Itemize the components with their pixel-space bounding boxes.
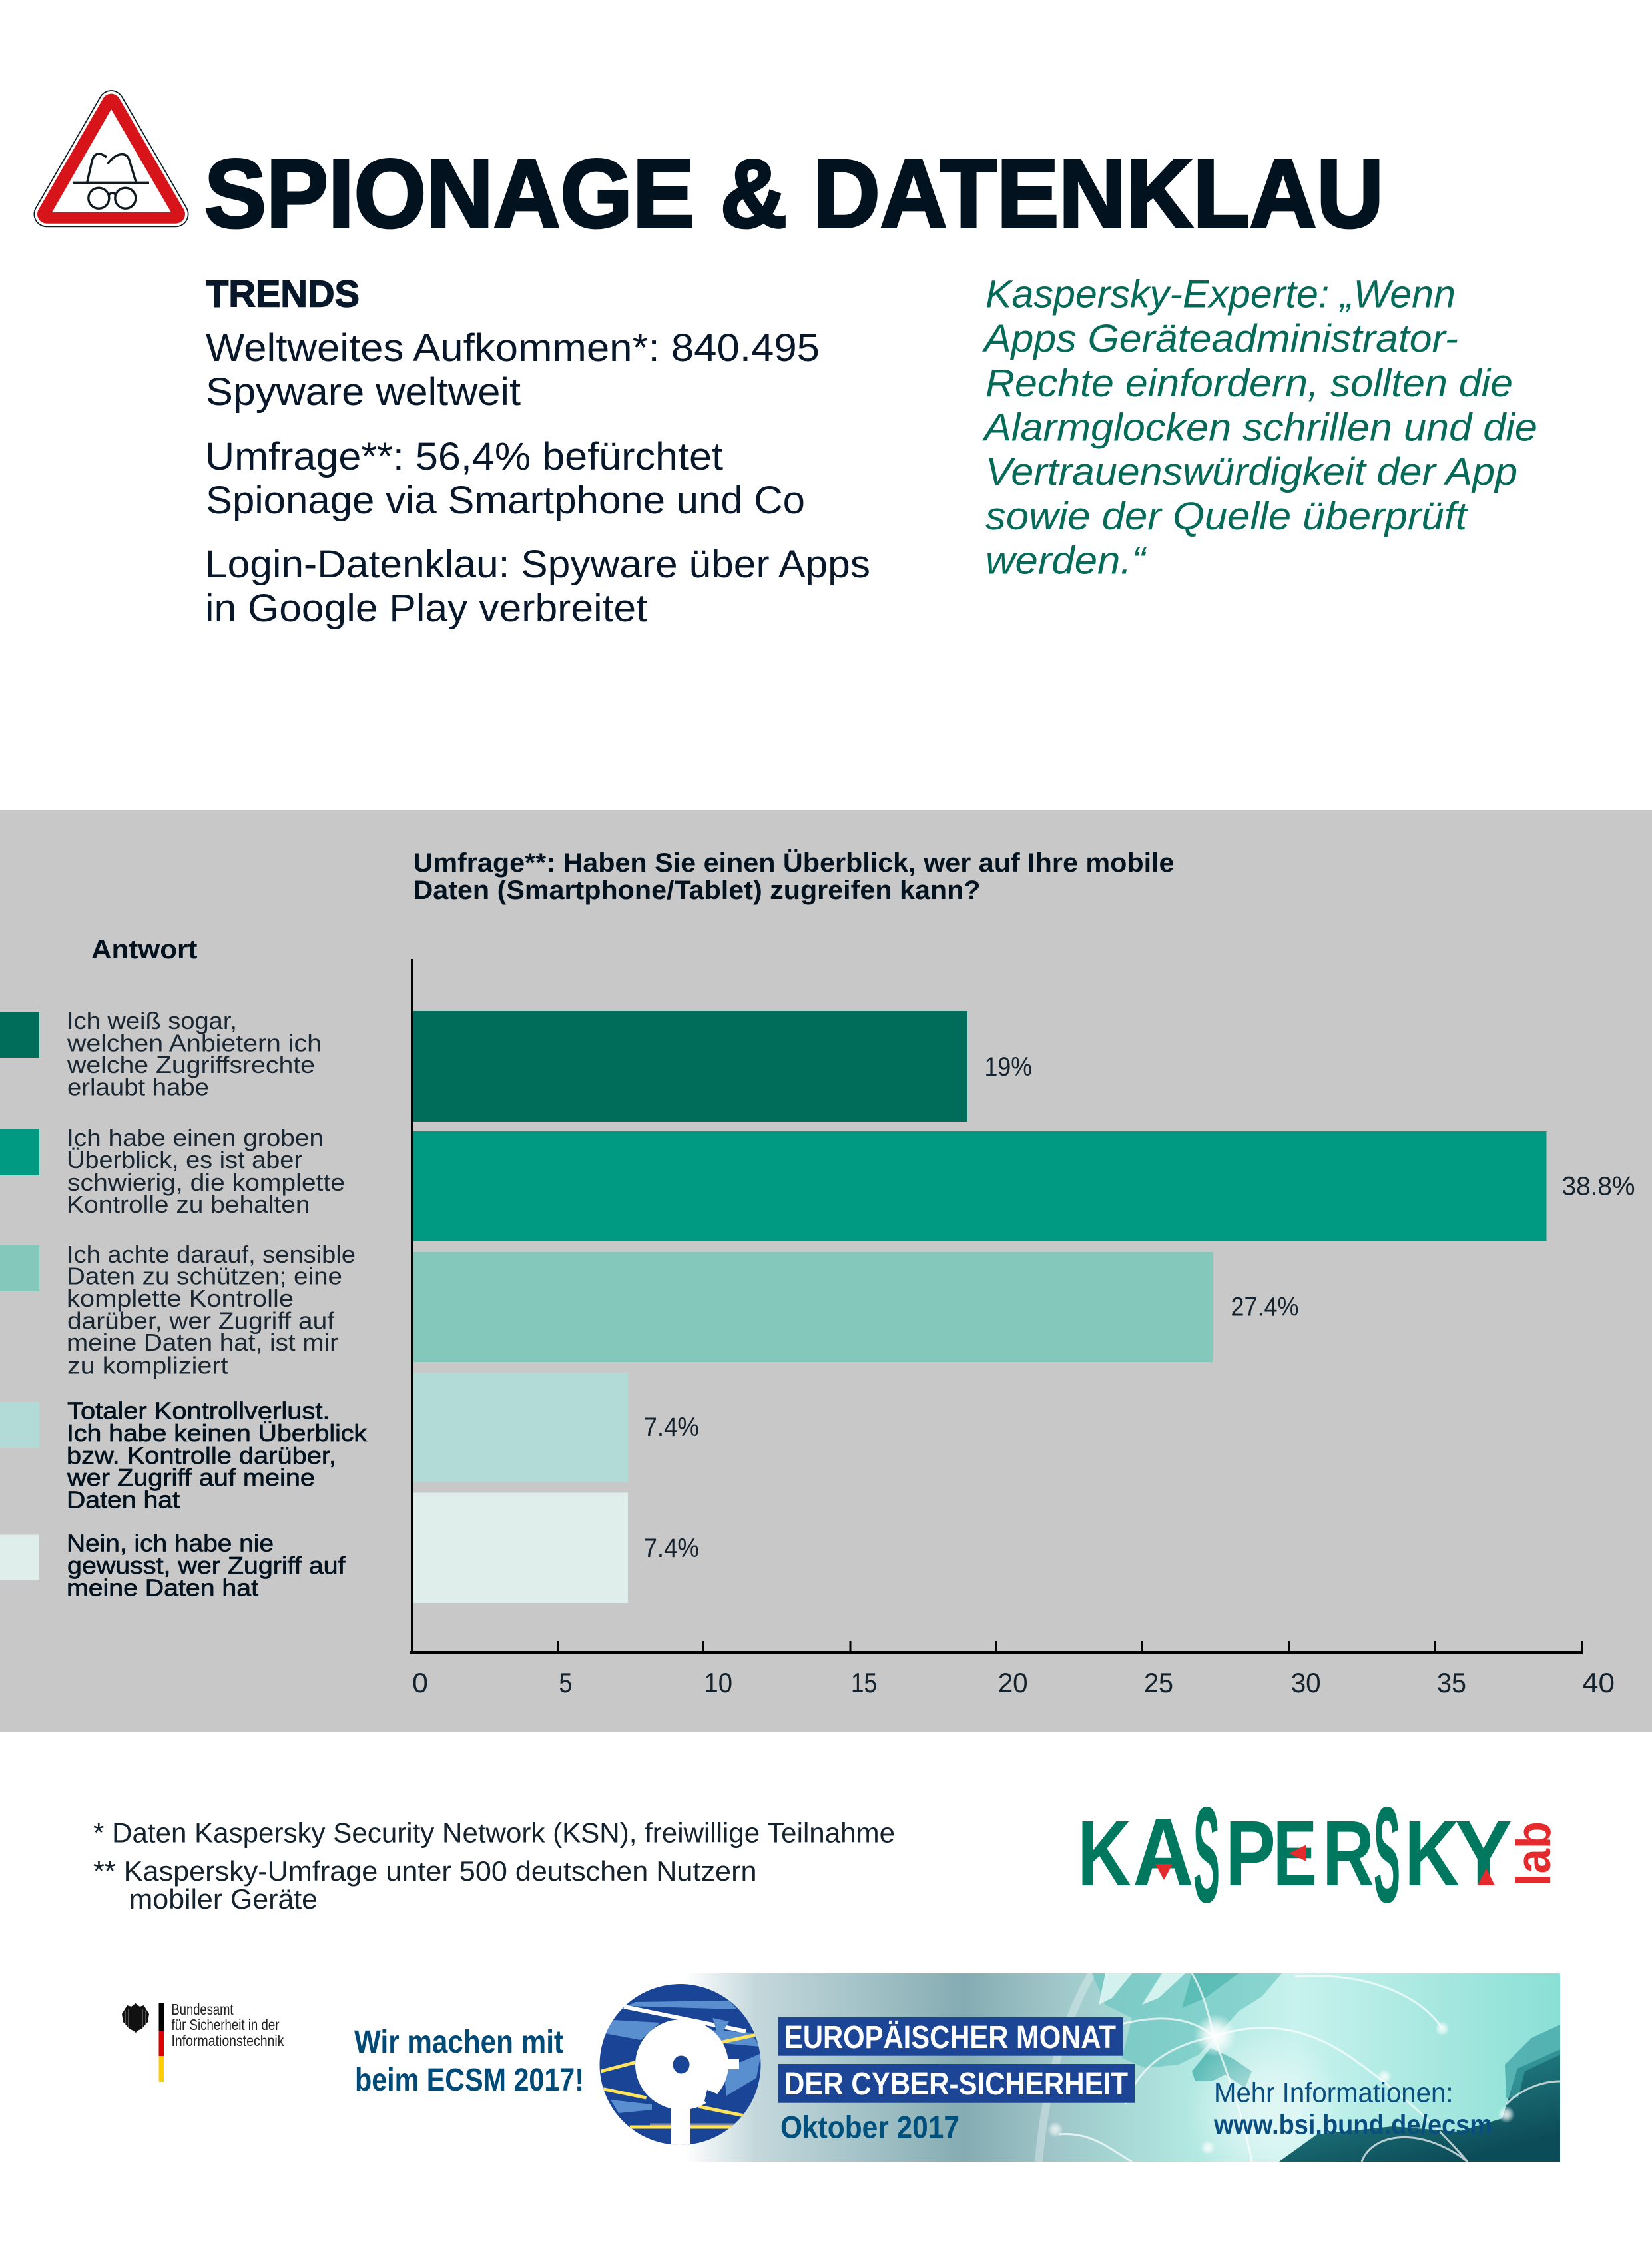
agency name: Bundesamt	[172, 2001, 234, 2018]
trend 3: in Google Play verbreitet	[205, 587, 647, 630]
axis labels: 15	[851, 1667, 877, 1698]
trend 3	[205, 543, 870, 630]
bar 7.4% second: 7.4%	[643, 1534, 699, 1563]
axis labels: 40	[1582, 1667, 1615, 1698]
more information: Mehr Informationen:	[1214, 2077, 1453, 2108]
kaspersky logo: lab	[1507, 1821, 1561, 1886]
legend swatch 1	[0, 1012, 39, 1058]
legend text 1: erlaubt habe	[67, 1074, 209, 1101]
title box 2: DER CYBER-SICHERHEIT	[784, 2067, 1128, 2102]
legend text 3: meine Daten hat, ist mir	[67, 1329, 338, 1356]
bar 38.8%	[413, 1131, 1635, 1241]
kaspersky logo: K	[1404, 1801, 1460, 1905]
expert quote: Kaspersky-Experte: „Wenn	[985, 273, 1456, 316]
title: SPIONAGE & DATENKLAU	[204, 139, 1384, 248]
ECSM emblem	[599, 1984, 761, 2151]
bar 19%	[413, 1011, 1032, 1122]
expert quote	[982, 273, 1537, 583]
legend swatch 2	[0, 1129, 39, 1175]
footnotes: mobiler Geräte	[129, 1883, 318, 1915]
flag bar	[158, 2003, 164, 2082]
axis labels	[412, 1667, 1615, 1698]
trends text block	[205, 273, 870, 630]
axis labels: 0	[412, 1667, 428, 1698]
legend text 2: schwierig, die komplette	[67, 1169, 345, 1196]
legend text 3: darüber, wer Zugriff auf	[67, 1307, 335, 1334]
axis labels: 30	[1291, 1667, 1321, 1698]
axis labels: 35	[1437, 1667, 1466, 1698]
kaspersky logo: A	[1133, 1798, 1194, 1906]
footnotes: ** Kaspersky-Umfrage unter 500 deutschen Nutzern	[93, 1855, 756, 1887]
title box 1: EUROPÄISCHER MONAT	[784, 2020, 1116, 2055]
legend text 1: welche Zugriffsrechte	[67, 1051, 315, 1078]
bar chart	[413, 1011, 1635, 1603]
trend 1	[206, 326, 820, 414]
bar 7.4% second	[413, 1493, 699, 1603]
kaspersky logo: S	[1374, 1779, 1400, 1931]
survey question heading: Daten (Smartphone/Tablet) zugreifen kann?	[413, 876, 980, 905]
legend text 4: bzw. Kontrolle darüber,	[67, 1442, 336, 1469]
legend text 4: Daten hat	[67, 1486, 180, 1513]
agency name: Informationstechnik	[172, 2032, 284, 2049]
agency name	[172, 2001, 284, 2049]
BSI logo	[122, 2001, 284, 2082]
trend 2: Spionage via Smartphone und Co	[206, 479, 805, 522]
axis labels: 10	[704, 1667, 732, 1698]
bar 7.4% first: 7.4%	[643, 1413, 699, 1442]
trends heading: TRENDS	[206, 273, 360, 316]
panel: survey chart	[0, 810, 1652, 1732]
legend text 2: Kontrolle zu behalten	[67, 1191, 310, 1218]
legend text 2	[67, 1124, 345, 1218]
bar 27.4%	[413, 1252, 1298, 1362]
kaspersky logo: E	[1273, 1801, 1317, 1905]
more information: www.bsi.bund.de/ecsm	[1213, 2109, 1492, 2140]
legend text 3: Ich achte darauf, sensible	[67, 1241, 356, 1268]
axis labels: 20	[998, 1667, 1028, 1698]
more information	[1213, 2077, 1492, 2140]
legend text 4: wer Zugriff auf meine	[67, 1464, 315, 1491]
expert quote: Rechte einfordern, sollten die	[985, 362, 1513, 405]
legend swatch 3	[0, 1245, 39, 1291]
legend heading: Antwort	[91, 935, 197, 964]
legend text 3: komplette Kontrolle	[67, 1285, 294, 1312]
legend text 3	[67, 1241, 356, 1379]
axis labels: 25	[1144, 1667, 1173, 1698]
survey question heading	[413, 848, 1175, 905]
ECSM banner	[695, 1973, 1560, 2162]
legend swatch 5	[0, 1534, 39, 1580]
ECSM slogan: beim ECSM 2017!	[355, 2063, 584, 2098]
date label: Oktober 2017	[780, 2110, 960, 2145]
trend 1: Spyware weltweit	[206, 370, 521, 414]
legend text 4	[67, 1397, 368, 1513]
legend text 4: Ich habe keinen Überblick	[67, 1419, 368, 1447]
legend text 5	[67, 1529, 346, 1601]
trend 2: Umfrage**: 56,4% befürchtet	[205, 435, 723, 478]
agency name: für Sicherheit in der	[172, 2016, 280, 2033]
ECSM slogan	[354, 2025, 584, 2098]
legend text 1: Ich weiß sogar,	[67, 1007, 237, 1034]
legend text 4: Totaler Kontrollverlust.	[67, 1397, 330, 1424]
legend text 5: Nein, ich habe nie	[67, 1529, 274, 1557]
kaspersky logo	[1077, 1779, 1561, 1931]
expert quote: Apps Geräteadministrator-	[982, 317, 1458, 360]
bar 19%: 19%	[984, 1052, 1032, 1082]
expert quote: sowie der Quelle überprüft	[985, 495, 1469, 538]
kaspersky logo: P	[1225, 1801, 1276, 1905]
trend 2	[205, 435, 805, 522]
expert quote: Vertrauenswürdigkeit der App	[985, 450, 1517, 493]
bar 27.4%: 27.4%	[1231, 1292, 1298, 1321]
footnotes	[93, 1817, 895, 1915]
bar 38.8%: 38.8%	[1562, 1172, 1635, 1201]
kaspersky logo: Y	[1455, 1801, 1512, 1905]
legend text 1: welchen Anbietern ich	[67, 1029, 322, 1056]
survey question heading: Umfrage**: Haben Sie einen Überblick, wer auf Ihre mobile	[413, 848, 1175, 878]
banner globe artwork	[1035, 1973, 1560, 2162]
kaspersky logo: R	[1322, 1801, 1374, 1905]
trend 3: Login-Datenklau: Spyware über Apps	[205, 543, 870, 586]
ECSM slogan: Wir machen mit	[354, 2025, 563, 2060]
legend text 3: zu kompliziert	[67, 1351, 228, 1379]
legend text 5: meine Daten hat	[67, 1574, 258, 1601]
legend swatch 4	[0, 1402, 39, 1448]
legend text 3: Daten zu schützen; eine	[67, 1263, 342, 1289]
kaspersky logo: S	[1193, 1779, 1220, 1931]
legend text 1	[67, 1007, 322, 1101]
chart axes	[410, 959, 1583, 1654]
axis labels: 5	[559, 1667, 572, 1698]
kaspersky logo: K	[1077, 1801, 1131, 1905]
expert quote: Alarmglocken schrillen und die	[982, 406, 1537, 450]
expert quote: werden.“	[985, 539, 1147, 583]
warning sign icon	[47, 103, 176, 214]
bar 7.4% first	[413, 1373, 699, 1482]
trend 1: Weltweites Aufkommen*: 840.495	[206, 326, 820, 370]
legend text 5: gewusst, wer Zugriff auf	[67, 1552, 346, 1579]
legend text 2: Überblick, es ist aber	[67, 1146, 302, 1173]
legend text 2: Ich habe einen groben	[67, 1124, 324, 1151]
footnotes: * Daten Kaspersky Security Network (KSN), freiwillige Teilnahme	[93, 1817, 895, 1849]
icon: federal eagle	[122, 2003, 149, 2033]
